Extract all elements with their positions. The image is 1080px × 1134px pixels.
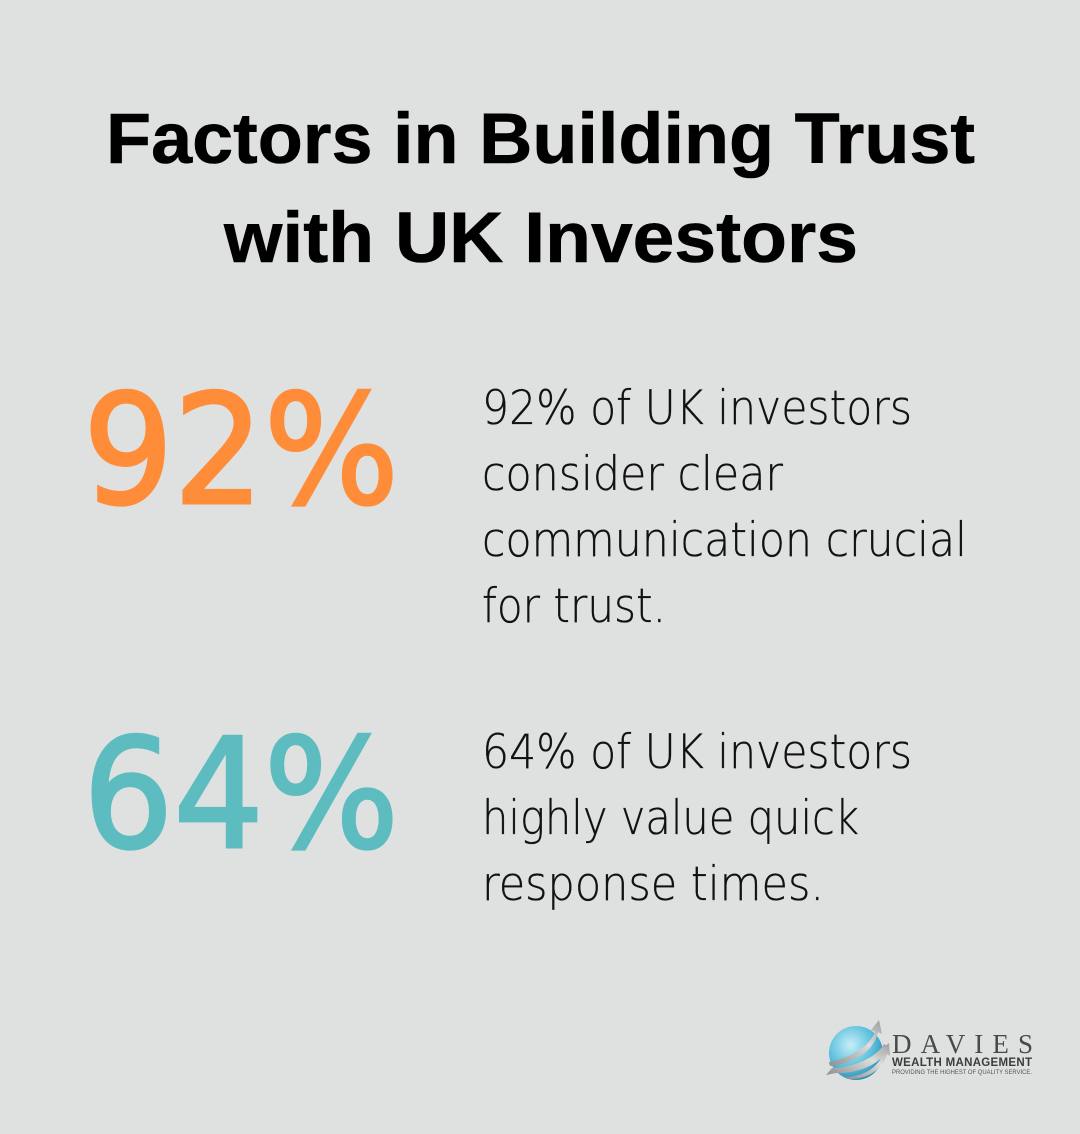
text block: 64% description	[482, 725, 912, 912]
text block: 92% description: consider clear	[482, 447, 784, 502]
text block: 92% description	[482, 381, 967, 634]
title: with UK Investors	[223, 199, 858, 278]
logo wordmark: DAVIES	[892, 1029, 1033, 1059]
text block: 92% description: communication crucial	[482, 513, 967, 568]
title: Factors in Building Trust	[106, 100, 975, 179]
logo: Davies Wealth Management	[826, 1020, 1033, 1080]
stat: 92%: 92%	[83, 362, 399, 539]
logo subtitle: WEALTH MANAGEMENT	[892, 1057, 1032, 1069]
text block: 64% description: 64% of UK investors	[482, 725, 912, 780]
text block: 92% description: for trust.	[482, 579, 666, 634]
icon: globe with arrows	[826, 1020, 890, 1080]
text block: 92% description: 92% of UK investors	[482, 381, 912, 436]
text block: 64% description: highly value quick	[482, 791, 859, 846]
text block: 64% description: response times.	[482, 857, 824, 912]
title	[106, 100, 975, 278]
logo tagline: PROVIDING THE HIGHEST OF QUALITY SERVICE.	[892, 1069, 1032, 1076]
stat: 64%: 64%	[83, 706, 399, 883]
